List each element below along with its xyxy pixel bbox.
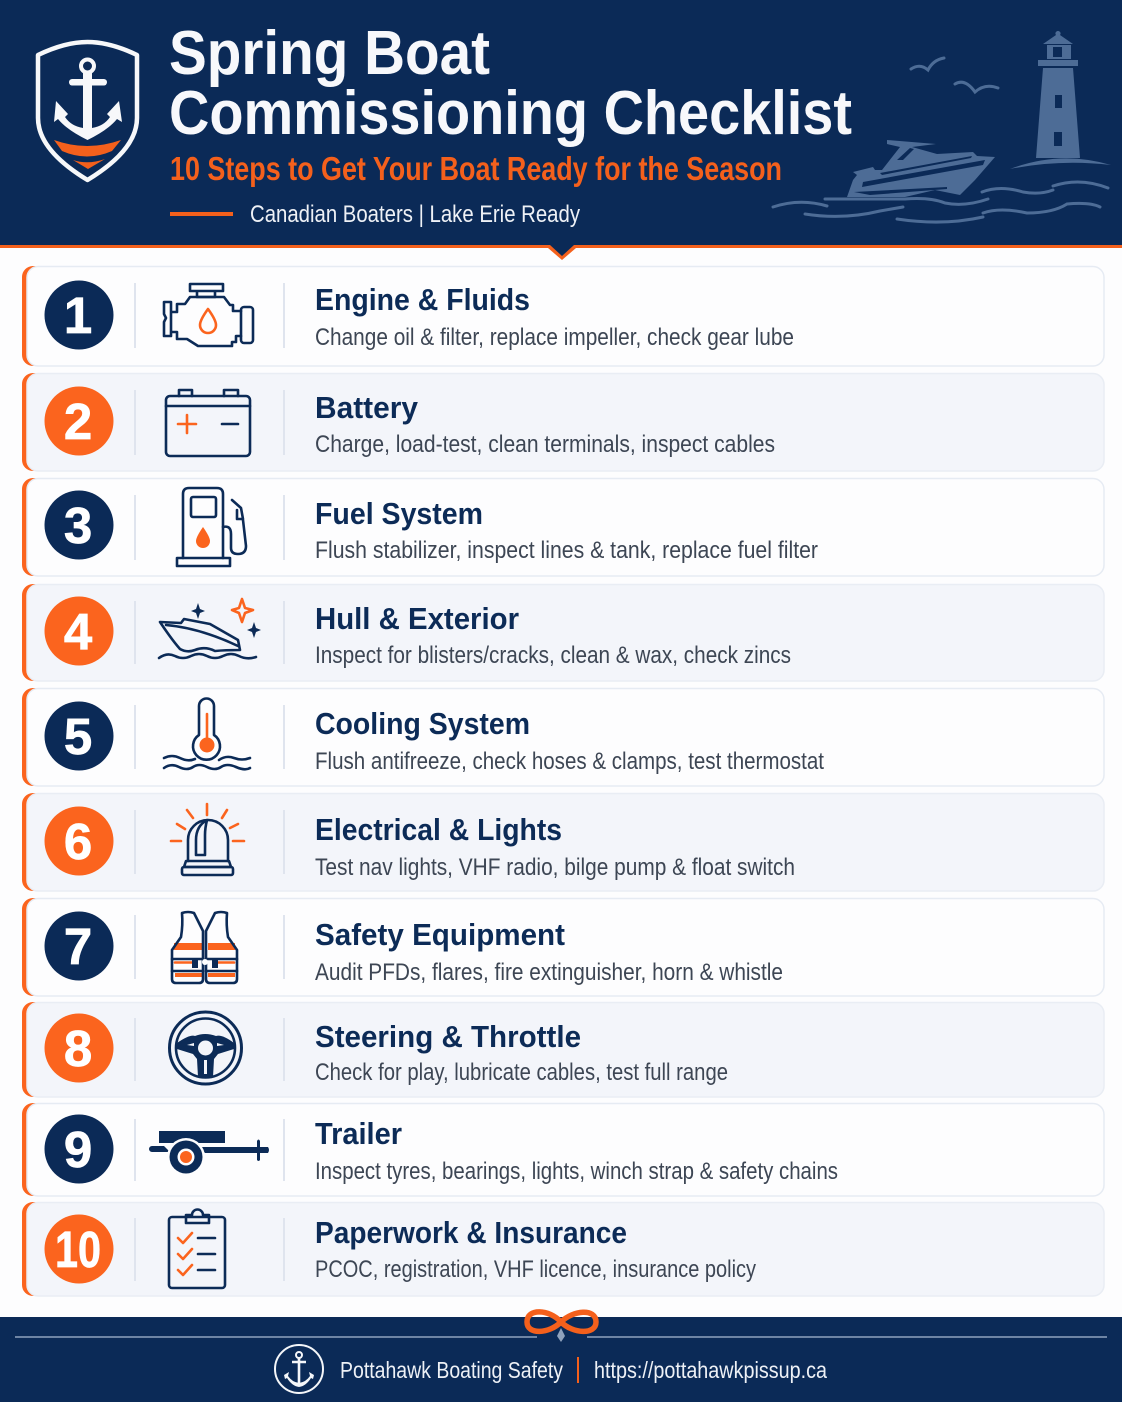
row 2: battery [22,373,1104,471]
step 7 text [315,917,783,986]
step 7 text: Audit PFDs, flares, fire extinguisher, horn & whistle [315,959,783,986]
step 10 text [315,1215,756,1283]
step 3 text: Fuel System [315,496,483,531]
step number 9: 9 [64,1121,92,1178]
row 10: paperwork and insurance [22,1202,1104,1296]
step 2 text [315,390,775,458]
step number 1: 1 [64,287,92,344]
step number 10: 10 [55,1221,101,1278]
icon: clipboard checklist [169,1210,225,1288]
icon: beacon light [171,804,244,875]
icon: steering wheel [170,1012,242,1084]
icon: battery [166,390,250,456]
title: Spring Boat [169,19,490,88]
step 7 text: Safety Equipment [315,917,565,952]
step 10 text: Paperwork & Insurance [315,1215,627,1250]
row 5: cooling system [22,688,1104,786]
step 8 text [315,1019,728,1086]
step 9 text: Trailer [315,1116,402,1151]
row 7: safety equipment [22,898,1104,996]
step number 6 [44,806,114,876]
row 9: trailer [22,1103,1104,1196]
step 9 text: Inspect tyres, bearings, lights, winch strap & safety chains [315,1158,838,1185]
step 10 text: PCOC, registration, VHF licence, insurance policy [315,1256,756,1283]
title [169,19,852,148]
step 4 text: Inspect for blisters/cracks, clean & wax, check zincs [315,642,791,669]
step number 5 [44,702,114,770]
step 6 text: Test nav lights, VHF radio, bilge pump & float switch [315,854,795,881]
step number 1 [44,280,114,350]
step number 8: 8 [64,1020,92,1077]
footer url: https://pottahawkpissup.ca [594,1357,827,1383]
step 2 text: Battery [315,390,419,425]
row 6: electrical and lights [22,793,1104,891]
step 5 text [315,706,824,775]
step 6 text [315,812,795,881]
illustration: lighthouse [1010,31,1111,169]
row 1: engine and fluids [22,266,1104,366]
step 5 text: Cooling System [315,706,530,741]
step number 3: 3 [64,497,92,554]
icon: fuel pump [177,488,246,566]
step 9 text [315,1116,838,1185]
step number 9 [44,1114,114,1184]
row 8: steering and throttle [22,1002,1104,1097]
icon: boat with sparkles [159,599,261,658]
footer banner [0,1312,1122,1402]
step 5 text: Flush antifreeze, check hoses & clamps, test thermostat [315,748,824,775]
icon: trailer [149,1131,269,1176]
title: Commissioning Checklist [169,79,852,148]
step number 4: 4 [64,603,93,660]
step 3 text [315,496,818,564]
step 1 text: Engine & Fluids [315,282,530,317]
step 4 text [315,601,791,669]
step 1 text [315,282,794,351]
icon: rope knot [527,1312,596,1342]
icon: engine [164,284,253,346]
header banner [0,0,1122,260]
illustration: waves [773,182,1108,222]
step number 10 [44,1214,114,1284]
subtitle: 10 Steps to Get Your Boat Ready for the Season [170,150,782,187]
step number 2: 2 [64,393,92,450]
step number 5: 5 [64,708,92,765]
step number 7 [44,912,114,980]
step number 6: 6 [64,813,92,870]
step 8 text: Check for play, lubricate cables, test full range [315,1059,728,1086]
row 3: fuel system [22,478,1104,576]
step 3 text: Flush stabilizer, inspect lines & tank, replace fuel filter [315,537,818,564]
step number 4 [44,596,114,666]
illustration: seagulls [911,58,998,92]
footer organisation name: Pottahawk Boating Safety [340,1357,563,1383]
icon: anchor shield logo [38,42,137,180]
icon: anchor badge [275,1345,323,1393]
step 2 text: Charge, load-test, clean terminals, inspect cables [315,431,775,458]
step number 8 [44,1014,114,1082]
step 1 text: Change oil & filter, replace impeller, check gear lube [315,324,794,351]
step 4 text: Hull & Exterior [315,601,519,636]
step number 2 [44,386,114,456]
row 4: hull and exterior [22,584,1104,681]
icon: thermometer in water [164,699,250,769]
icon: life vest [172,912,237,983]
step number 3 [44,490,114,560]
step 6 text: Electrical & Lights [315,812,562,847]
step 8 text: Steering & Throttle [315,1019,581,1054]
tagline: Canadian Boaters | Lake Erie Ready [250,201,580,228]
step number 7: 7 [64,918,92,975]
illustration: motor boat [847,140,995,197]
